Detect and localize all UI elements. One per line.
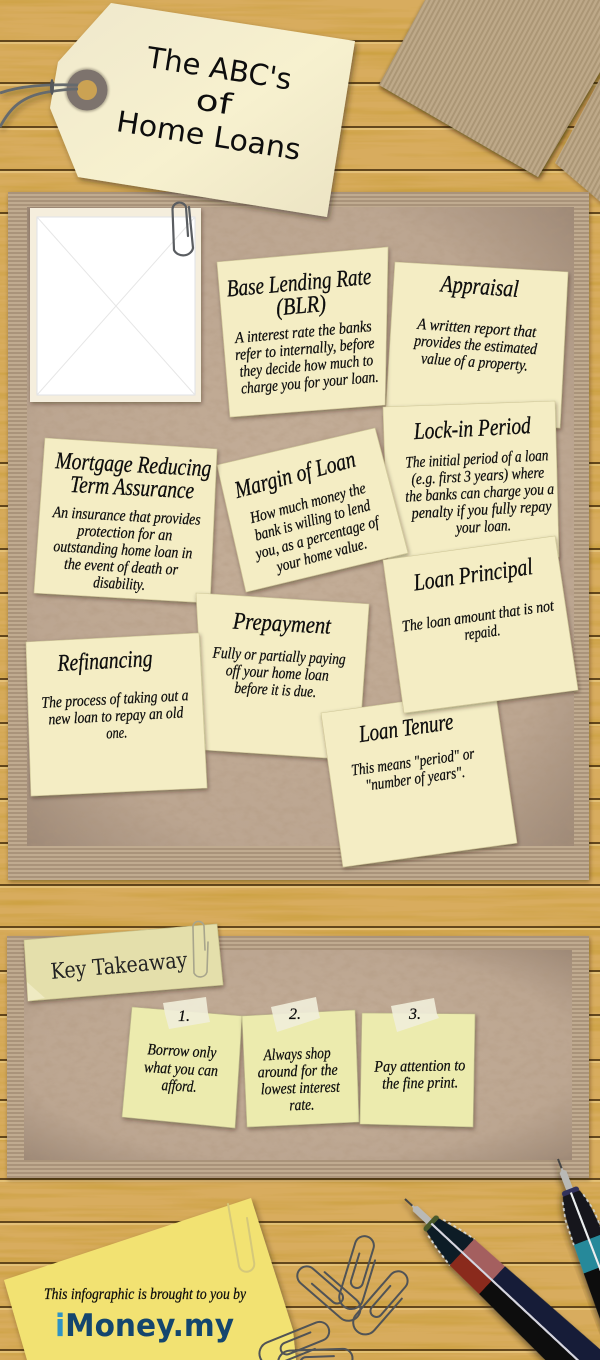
note: Base Lending Rate: (BLR) — [275, 291, 327, 321]
sticky note 2: around for the — [257, 1062, 338, 1081]
note: Margin of Loan: Margin of Loan — [231, 447, 358, 504]
note: Mortgage Reducing Term Assurance: Term Assurance — [70, 472, 195, 504]
sticky note 2 — [242, 997, 359, 1127]
note: Loan Tenure — [321, 689, 517, 867]
note: Lock-in Period: (e.g. first 3 years) where — [411, 464, 545, 488]
note: Margin of Loan: your home value. — [273, 535, 369, 576]
tape 2 — [271, 997, 320, 1032]
note: Loan Tenure: Loan Tenure — [357, 709, 455, 748]
yellow sponsor note — [4, 1198, 296, 1360]
note: Loan Tenure: "number of years". — [365, 764, 466, 795]
note: Lock-in Period: the banks can charge you a — [405, 481, 555, 506]
panel: key takeaway board — [7, 936, 589, 1178]
note: Mortgage Reducing Term Assurance: disability. — [93, 574, 146, 594]
corrugated cardboard sheets, top right — [379, 0, 600, 210]
sticky note 2: 2. — [289, 1006, 301, 1023]
note: Appraisal: provides the estimated — [413, 333, 538, 358]
sticky note 2: Always shop — [263, 1045, 331, 1064]
tape 3 — [391, 998, 439, 1032]
note: Margin of Loan: bank is willing to lend — [253, 497, 373, 544]
note: Loan Principal: The loan amount that is not — [401, 597, 555, 636]
note: Mortgage Reducing Term Assurance: protection for an — [76, 522, 173, 544]
note: Loan Principal: repaid. — [463, 622, 501, 644]
title text: The ABC's — [144, 40, 294, 97]
sticky note 2: lowest interest — [261, 1079, 341, 1098]
note: Lock-in Period — [383, 401, 559, 560]
note: Mortgage Reducing Term Assurance: Mortgage Reducing — [54, 448, 212, 482]
sticky note 1: Borrow only — [147, 1041, 218, 1062]
note: Appraisal — [385, 262, 568, 428]
sticky note 1: afford. — [161, 1077, 197, 1096]
note: Mortgage Reducing Term Assurance — [34, 438, 217, 603]
note: Prepayment — [196, 593, 369, 760]
note: Refinancing: Refinancing — [56, 646, 153, 677]
icon: tag grommet — [65, 68, 109, 112]
note: Mortgage Reducing Term Assurance: An insurance that provides — [52, 504, 201, 529]
icon: paperclips on note corner — [256, 1319, 353, 1360]
sticky note 1: what you can — [144, 1059, 218, 1080]
title text: of — [194, 82, 235, 122]
note: Base Lending Rate: A interest rate the banks — [233, 318, 372, 347]
note: Lock-in Period: penalty if you fully repay — [410, 498, 553, 522]
title text: Home Loans — [114, 104, 303, 167]
note: Loan Principal: Loan Principal — [411, 554, 535, 597]
sponsor text: This infographic is brought to you by — [44, 1286, 247, 1303]
note: Loan Tenure: This means "period" or — [350, 745, 476, 779]
note: Prepayment: Prepayment — [231, 609, 333, 640]
note: Refinancing: The process of taking out a — [41, 687, 189, 712]
heading label: Key Takeaway — [24, 921, 223, 1001]
note: Margin of Loan: How much money the — [247, 480, 368, 527]
note: Lock-in Period: The initial period of a loan — [405, 447, 549, 472]
note: Appraisal: A written report that — [416, 316, 537, 341]
note: Base Lending Rate: charge you for your loan. — [240, 369, 379, 398]
icon: scattered paperclips — [293, 1234, 415, 1339]
sticky note 1: 1. — [178, 1008, 190, 1025]
icon: pen, teal — [539, 1152, 600, 1360]
sticky note 3 — [360, 998, 475, 1127]
icon: pen, navy and maroon — [388, 1181, 600, 1360]
heading label: Key Takeaway: Key Takeaway — [50, 948, 189, 985]
note: Lock-in Period: your loan. — [454, 517, 511, 537]
note: Appraisal: Appraisal — [438, 271, 520, 303]
note: Margin of Loan: you, as a percentage of — [252, 513, 383, 563]
sticky note 3: Pay attention to — [373, 1057, 465, 1076]
icon: string — [0, 79, 78, 127]
note: Mortgage Reducing Term Assurance: the event of death or — [64, 556, 179, 579]
note: Appraisal: value of a property. — [420, 350, 528, 375]
sticky note 3: the fine print. — [382, 1074, 458, 1093]
panel: glossary board — [8, 192, 589, 880]
note: Lock-in Period: Lock-in Period — [412, 413, 532, 445]
note: Base Lending Rate: they decide how much to — [239, 352, 374, 381]
note: Margin of Loan — [217, 428, 408, 592]
note: Prepayment: before it is due. — [234, 680, 317, 701]
logo: iMoney.my: iMoney.my — [55, 1308, 234, 1344]
paperclip on sponsor note — [228, 1204, 254, 1272]
tape 1 — [163, 997, 210, 1029]
note: Base Lending Rate — [217, 247, 388, 417]
sticky note 1 — [122, 997, 242, 1128]
note: Loan Principal — [383, 536, 578, 713]
title tag — [0, 3, 355, 217]
note: Refinancing: one. — [106, 724, 128, 742]
note: Prepayment: off your home loan — [225, 662, 329, 685]
sticky note 2: rate. — [289, 1096, 315, 1114]
paperclip on label — [193, 921, 208, 977]
paperclip on photo frame — [172, 203, 193, 255]
note: Refinancing — [26, 633, 207, 796]
note: Base Lending Rate: Base Lending Rate — [226, 264, 373, 302]
note: Refinancing: new loan to repay an old — [48, 704, 185, 728]
sticky note 3: 3. — [408, 1006, 421, 1023]
note: Mortgage Reducing Term Assurance: outstanding home loan in — [53, 538, 193, 562]
note: Base Lending Rate: refer to internally, before — [234, 335, 375, 364]
note: Prepayment: Fully or partially paying — [211, 644, 346, 668]
photo placeholder frame — [30, 208, 201, 402]
title text — [114, 37, 314, 167]
